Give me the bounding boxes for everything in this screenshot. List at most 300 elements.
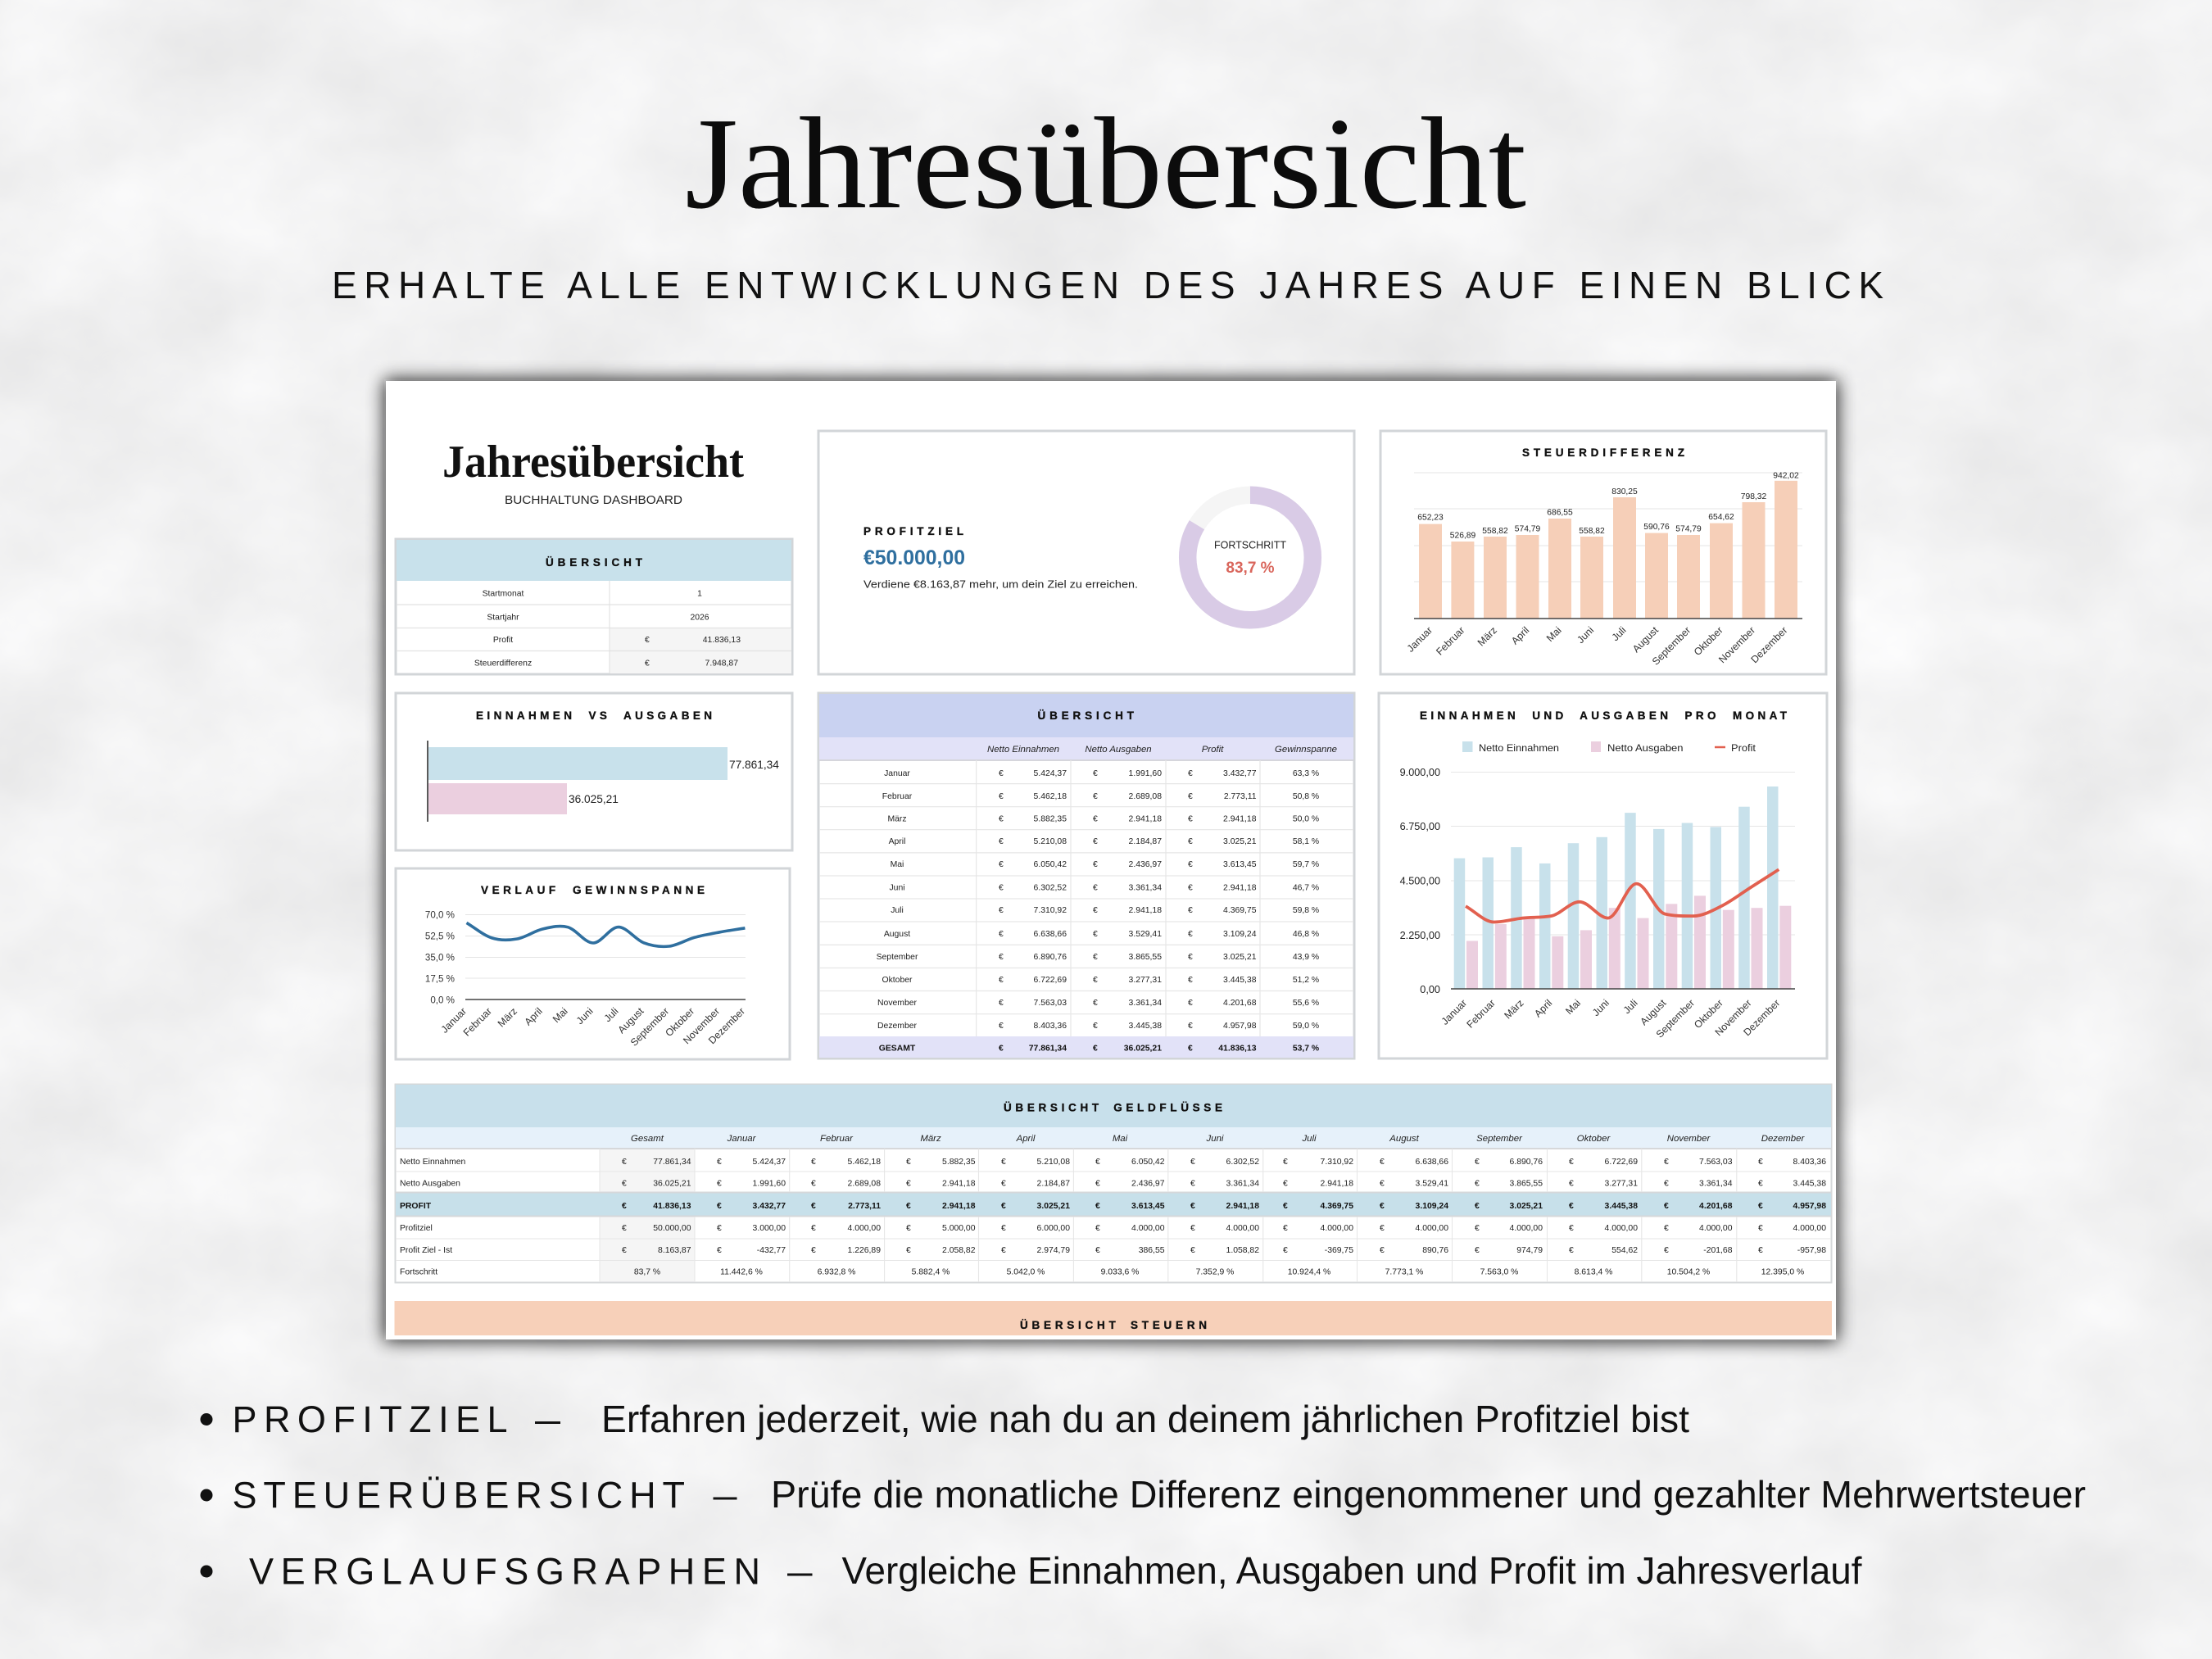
column headers: September [1476, 1134, 1523, 1144]
bar value labels: 652,23 [1417, 513, 1444, 523]
dashboard sheet shadow [384, 379, 1838, 1341]
row: Netto Einnahmen: 6.302,52 [1226, 1158, 1259, 1167]
row: Profitziel: € [1664, 1224, 1669, 1233]
x axis labels: Mai [1563, 997, 1583, 1017]
x axis labels: August [1638, 997, 1669, 1027]
bar value labels: 942,02 [1773, 472, 1799, 480]
row: Profitziel: € [717, 1224, 722, 1233]
row: Oktober: € [1093, 976, 1098, 985]
row: Juni: 46,7 % [1293, 883, 1319, 893]
row: Netto Einnahmen: Netto Einnahmen [400, 1158, 466, 1167]
row: September: 6.890,76 [1034, 953, 1067, 962]
row: März: € [999, 814, 1004, 824]
row: Juli: Juli [891, 906, 904, 915]
row: Fortschritt: 7.563,0 % [1480, 1268, 1518, 1276]
row: September [877, 953, 1319, 962]
row: Profit [493, 636, 741, 645]
x axis labels: Juni [1575, 624, 1596, 646]
row: Januar [884, 769, 1319, 778]
row: Netto Einnahmen: 77.861,34 [653, 1158, 691, 1167]
row: Netto Einnahmen: 6.638,66 [1416, 1158, 1448, 1167]
row: Startmonat: Startmonat [483, 590, 524, 598]
bullet: steuerübersicht: STEUERÜBERSICHT [233, 1475, 685, 1516]
subtitle: ERHALTE ALLE ENTWICKLUNGEN DES JAHRES AUF EINEN BLICK [332, 264, 1883, 306]
row: Profit Ziel - Ist: € [622, 1246, 627, 1255]
row: Profit Ziel - Ist [400, 1246, 1826, 1255]
row: Fortschritt: 6.932,8 % [818, 1268, 855, 1276]
row: Dezember: € [999, 1022, 1004, 1031]
x axis labels: April [523, 1005, 545, 1028]
row: PROFIT: € [1475, 1202, 1480, 1211]
row: März: 50,0 % [1293, 814, 1319, 824]
row: PROFIT: PROFIT [400, 1202, 432, 1211]
bar value labels: 830,25 [1611, 487, 1638, 496]
row: April: 58,1 % [1293, 837, 1319, 846]
row: Netto Einnahmen: € [1190, 1158, 1195, 1167]
row: April: € [999, 837, 1004, 846]
row: Juni: Juni [889, 883, 905, 893]
y axis labels: 52,5 % [425, 931, 455, 942]
column headers: April [1016, 1134, 1036, 1144]
row: Netto Einnahmen: 5.210,08 [1037, 1158, 1070, 1167]
row: Profitziel: 4.000,00 [848, 1224, 881, 1233]
row: PROFIT [400, 1202, 1826, 1211]
row: Netto Ausgaben: 3.865,55 [1510, 1180, 1543, 1188]
row: November: 7.563,03 [1034, 999, 1067, 1008]
row: Profitziel: € [622, 1224, 627, 1233]
x axis labels [1439, 997, 1782, 1040]
x axis labels: Dezember [1749, 624, 1790, 665]
row: Februar: € [1188, 792, 1193, 801]
heading: STEUERDIFFERENZ [1522, 446, 1684, 459]
row: Steuerdifferenz [474, 659, 738, 669]
row: PROFIT: 41.836,13 [653, 1202, 691, 1211]
row: Netto Ausgaben: € [1001, 1180, 1006, 1188]
row: November: € [1093, 999, 1098, 1008]
bars: steuerdifferenz [1419, 481, 1797, 619]
row: Profitziel: 3.000,00 [753, 1224, 786, 1233]
row: Oktober [882, 976, 1319, 985]
row: PROFIT: 3.025,21 [1510, 1202, 1543, 1211]
row: Oktober: 3.277,31 [1129, 976, 1162, 985]
row: Januar: € [999, 769, 1004, 778]
row: September: € [1188, 953, 1193, 962]
bar value labels: 654,62 [1708, 513, 1734, 522]
row: Profit Ziel - Ist: 2.974,79 [1037, 1246, 1070, 1255]
x axis labels [439, 1005, 747, 1049]
row: Mai: 2.436,97 [1129, 860, 1162, 869]
y axis labels: 2.250,00 [1400, 930, 1440, 941]
legend: Netto Einnahmen [1479, 742, 1559, 754]
row: PROFIT: € [811, 1202, 816, 1211]
panel: übersicht steuern [395, 1301, 1832, 1335]
bullet: profitziel: — [535, 1398, 560, 1440]
row: September: September [877, 953, 918, 962]
column headers: März [920, 1134, 941, 1144]
row: PROFIT: € [622, 1202, 627, 1211]
row: PROFIT: € [1664, 1202, 1669, 1211]
x axis labels: Juli [602, 1005, 621, 1024]
row: PROFIT: € [1190, 1202, 1195, 1211]
row: Juni [889, 883, 1319, 893]
column headers: Juni [1206, 1134, 1224, 1144]
x axis labels [1405, 624, 1790, 668]
row: Netto Ausgaben: € [1664, 1180, 1669, 1188]
bar value labels: 686,55 [1547, 508, 1573, 518]
x axis labels: September [1650, 624, 1693, 668]
legend: Netto Ausgaben [1607, 742, 1683, 754]
y axis labels: 6.750,00 [1400, 821, 1440, 832]
row: Juli [891, 906, 1319, 915]
donut: fortschritt: 83,7 % [1226, 560, 1275, 577]
row: Netto Einnahmen: 6.050,42 [1131, 1158, 1165, 1167]
bar value labels: 574,79 [1675, 524, 1702, 534]
column headers: Juli [1301, 1134, 1317, 1144]
row: Netto Ausgaben: 36.025,21 [653, 1180, 691, 1188]
row: Februar: € [999, 792, 1004, 801]
x axis labels: März [1502, 997, 1526, 1021]
row: Netto Einnahmen: 5.462,18 [848, 1158, 881, 1167]
x axis labels: Oktober [1692, 997, 1725, 1031]
row: Netto Einnahmen: € [906, 1158, 911, 1167]
row: Netto Ausgaben: € [622, 1180, 627, 1188]
row: Dezember: 8.403,36 [1034, 1022, 1067, 1031]
x axis labels: November [1713, 997, 1754, 1038]
row: Netto Einnahmen: 5.424,37 [753, 1158, 786, 1167]
row: Netto Einnahmen [400, 1158, 1826, 1167]
x axis labels: Oktober [1692, 624, 1725, 658]
row: Januar: € [1093, 769, 1098, 778]
column headers: Gesamt [631, 1134, 664, 1144]
x axis labels: Februar [1434, 624, 1467, 658]
row: Profit Ziel - Ist: 554,62 [1611, 1246, 1638, 1255]
column headers: Gewinnspanne [1275, 745, 1337, 755]
column headers: Februar [820, 1134, 854, 1144]
row: Mai: € [1093, 860, 1098, 869]
row: September: € [1093, 953, 1098, 962]
x axis labels: Juni [574, 1005, 596, 1027]
row: PROFIT: 3.445,38 [1605, 1202, 1638, 1211]
row: Profit Ziel - Ist: € [1095, 1246, 1100, 1255]
row: Netto Ausgaben: 3.445,38 [1793, 1180, 1826, 1188]
row: Gesamt: € [999, 1044, 1004, 1054]
y axis labels: 70,0 % [425, 909, 455, 921]
x axis labels: Juli [1621, 997, 1640, 1016]
row: Netto Einnahmen: € [622, 1158, 627, 1167]
row: Fortschritt: 10.504,2 % [1667, 1268, 1710, 1276]
row: November: 55,6 % [1293, 999, 1319, 1008]
row: Oktober: Oktober [882, 976, 913, 985]
row: Gesamt: 53,7 % [1293, 1044, 1319, 1054]
row: Februar [882, 792, 1319, 801]
column headers: August [1389, 1134, 1420, 1144]
y axis labels: 0,00 [1420, 984, 1440, 995]
row: Profitziel: 4.000,00 [1226, 1224, 1259, 1233]
x axis labels: März [496, 1005, 519, 1029]
row: Netto Ausgaben: 3.529,41 [1416, 1180, 1448, 1188]
row: Profit Ziel - Ist: € [906, 1246, 911, 1255]
row: Mai [891, 860, 1319, 869]
row: März [887, 814, 1319, 824]
x axis labels: Januar [1439, 997, 1469, 1027]
row: August: € [1093, 930, 1098, 939]
row: Oktober: € [1188, 976, 1193, 985]
row: Fortschritt: 8.613,4 % [1575, 1268, 1612, 1276]
row: Netto Einnahmen: 6.722,69 [1605, 1158, 1638, 1167]
row: Gesamt: € [1188, 1044, 1193, 1054]
row: September: 43,9 % [1293, 953, 1319, 962]
row: Profit Ziel - Ist: 1.226,89 [848, 1246, 881, 1255]
axis [427, 741, 428, 822]
row: Profit Ziel - Ist: -957,98 [1797, 1246, 1826, 1255]
row: Netto Einnahmen: 5.882,35 [942, 1158, 976, 1167]
row: Netto Ausgaben: Netto Ausgaben [400, 1180, 460, 1188]
heading: VERLAUF GEWINNSPANNE [481, 884, 705, 896]
row: Profit Ziel - Ist: € [1569, 1246, 1574, 1255]
row: Profit Ziel - Ist: € [1664, 1246, 1669, 1255]
row: Netto Ausgaben: 2.941,18 [942, 1180, 976, 1188]
row: Fortschritt: 5.042,0 % [1007, 1268, 1045, 1276]
row: PROFIT: 3.109,24 [1416, 1202, 1448, 1211]
x axis labels: August [615, 1005, 646, 1036]
bar value labels: 526,89 [1450, 531, 1476, 541]
row: August: 3.529,41 [1129, 930, 1162, 939]
row: Mai: 59,7 % [1293, 860, 1319, 869]
row: Oktober: 6.722,69 [1034, 976, 1067, 985]
column headers: Januar [727, 1134, 757, 1144]
x axis labels: Mai [1544, 624, 1564, 644]
x axis labels: Juni [1590, 997, 1611, 1018]
panel: übersicht summary [396, 539, 792, 674]
bar: ausgaben [428, 783, 567, 814]
row: Profitziel: 4.000,00 [1321, 1224, 1353, 1233]
x axis labels: Januar [439, 1005, 469, 1036]
row: Profitziel: € [1569, 1224, 1574, 1233]
row: Oktober: 51,2 % [1293, 976, 1319, 985]
row: Juni: 3.361,34 [1129, 883, 1162, 893]
legend [1462, 741, 1756, 754]
row: März: 5.882,35 [1034, 814, 1067, 824]
profit goal amount: €50.000,00 [863, 546, 965, 569]
bullet: verglaufsgraphen: VERGLAUFSGRAPHEN [249, 1550, 760, 1593]
row: PROFIT: 4.957,98 [1793, 1202, 1826, 1211]
row: Juli: 2.941,18 [1129, 906, 1162, 915]
row: März: € [1093, 814, 1098, 824]
heading: EINNAHMEN VS AUSGABEN [476, 709, 712, 722]
bullet: steuerübersicht: — [713, 1475, 737, 1516]
line: gewinnspanne [467, 922, 745, 946]
row: Profit Ziel - Ist: € [1380, 1246, 1385, 1255]
row: Netto Ausgaben: € [811, 1180, 816, 1188]
row: Dezember: 4.957,98 [1223, 1022, 1257, 1031]
row: PROFIT: 4.201,68 [1699, 1202, 1733, 1211]
row: Netto Ausgaben: € [906, 1180, 911, 1188]
row: Profit Ziel - Ist: € [1475, 1246, 1480, 1255]
y axis labels: 35,0 % [425, 952, 455, 963]
value: ausgaben: 36.025,21 [569, 793, 619, 805]
column headers: Dezember [1761, 1134, 1805, 1144]
row: Netto Einnahmen: € [1095, 1158, 1100, 1167]
row: April: 2.184,87 [1129, 837, 1162, 846]
row: Dezember [877, 1022, 1319, 1031]
row: PROFIT: € [1001, 1202, 1006, 1211]
row: Netto Ausgaben: € [1758, 1180, 1763, 1188]
y axis labels: 0,0 % [430, 995, 455, 1006]
x axis labels: März [1475, 624, 1499, 648]
heading: übersicht geldflüsse: ÜBERSICHT GELDFLÜSSE [1004, 1101, 1222, 1114]
row: Profitziel: 5.000,00 [942, 1224, 976, 1233]
row: Mai: 6.050,42 [1034, 860, 1067, 869]
x axis labels: November [681, 1005, 722, 1046]
x axis labels: Januar [1405, 624, 1435, 655]
row: Netto Ausgaben: € [1095, 1180, 1100, 1188]
row: Februar: 50,8 % [1293, 792, 1319, 801]
row: Profitziel: € [1380, 1224, 1385, 1233]
row: Mai: Mai [891, 860, 904, 869]
row: Netto Ausgaben: 2.436,97 [1131, 1180, 1165, 1188]
x axis labels: Dezember [706, 1005, 747, 1046]
dashboard sheet [386, 381, 1836, 1339]
row: Fortschritt: 12.395,0 % [1761, 1268, 1804, 1276]
row: Profit Ziel - Ist: € [1283, 1246, 1288, 1255]
row: Profit Ziel - Ist: 386,55 [1139, 1246, 1165, 1255]
row: Steuerdifferenz: Steuerdifferenz [474, 659, 532, 669]
row: Startjahr: 2026 [690, 613, 709, 623]
row: November: € [999, 999, 1004, 1008]
row: Februar: 2.689,08 [1129, 792, 1162, 801]
row: Netto Einnahmen: € [811, 1158, 816, 1167]
row: Januar: 1.991,60 [1129, 769, 1162, 778]
row: Profit Ziel - Ist: 8.163,87 [658, 1246, 691, 1255]
row: März: € [1188, 814, 1193, 824]
row: Dezember: € [1093, 1022, 1098, 1031]
row: Profitziel: 6.000,00 [1037, 1224, 1070, 1233]
bar value labels: 574,79 [1515, 524, 1541, 534]
row: Netto Einnahmen: € [1758, 1158, 1763, 1167]
row: Profit Ziel - Ist: 2.058,82 [942, 1246, 976, 1255]
row: April: 5.210,08 [1034, 837, 1067, 846]
y axis labels: 17,5 % [425, 973, 455, 985]
row: Juli: 4.369,75 [1223, 906, 1257, 915]
row: Dezember: 3.445,38 [1129, 1022, 1162, 1031]
y axis labels [425, 909, 455, 1006]
row: Startmonat: 1 [697, 590, 702, 598]
row: Oktober: 3.445,38 [1223, 976, 1257, 985]
y axis labels: 4.500,00 [1400, 875, 1440, 886]
row: Profitziel: € [1190, 1224, 1195, 1233]
row: Profit Ziel - Ist: 1.058,82 [1226, 1246, 1259, 1255]
row: PROFIT: € [1283, 1202, 1288, 1211]
row: März: März [887, 814, 907, 824]
bullet: profitziel: Erfahren jederzeit, wie nah du an deinem jährlichen Profitziel bist [601, 1398, 1689, 1440]
row: Profit Ziel - Ist: -369,75 [1325, 1246, 1353, 1255]
column headers: Netto Einnahmen [987, 745, 1059, 755]
row: Netto Ausgaben [400, 1180, 1826, 1188]
row: PROFIT: € [1569, 1202, 1574, 1211]
panel: übersicht monthly table [818, 693, 1354, 1058]
row: September: 3.865,55 [1129, 953, 1162, 962]
row: Netto Einnahmen: € [1664, 1158, 1669, 1167]
title: Jahresübersicht [685, 90, 1526, 236]
bar value labels: 798,32 [1741, 492, 1767, 501]
goal note: Verdiene €8.163,87 mehr, um dein Ziel zu erreichen. [863, 578, 1138, 590]
row: Mai: 3.613,45 [1223, 860, 1257, 869]
column headers [631, 1134, 1805, 1144]
row: Fortschritt: Fortschritt [400, 1268, 437, 1276]
row: Juni: € [999, 883, 1004, 893]
row: PROFIT: € [906, 1202, 911, 1211]
row: Mai: € [999, 860, 1004, 869]
row: Profitziel: € [1283, 1224, 1288, 1233]
row: August: € [1188, 930, 1193, 939]
x axis labels: Juli [1610, 624, 1629, 643]
row: Netto Einnahmen: 8.403,36 [1793, 1158, 1826, 1167]
panel: profitziel [818, 431, 1354, 674]
row: Profitziel [400, 1224, 1826, 1233]
row: PROFIT: € [717, 1202, 722, 1211]
row: Netto Einnahmen: € [1001, 1158, 1006, 1167]
x axis labels: September [1654, 997, 1697, 1040]
bar value labels: 558,82 [1482, 527, 1508, 536]
y axis labels: 9.000,00 [1400, 767, 1440, 778]
row: Dezember: 59,0 % [1293, 1022, 1319, 1031]
row: Startjahr: Startjahr [487, 613, 519, 623]
bars: netto ausgaben [1466, 895, 1791, 989]
row: Netto Ausgaben: € [1475, 1180, 1480, 1188]
row: Netto Ausgaben: € [717, 1180, 722, 1188]
row: Juli: € [1093, 906, 1098, 915]
column headers [987, 745, 1337, 755]
heading: EINNAHMEN UND AUSGABEN PRO MONAT [1420, 709, 1788, 722]
row: Profitziel: Profitziel [400, 1224, 433, 1233]
row: Juli: € [999, 906, 1004, 915]
row: Profit Ziel - Ist: -201,68 [1703, 1246, 1733, 1255]
bar: einnahmen [428, 747, 728, 780]
row: Profitziel: 4.000,00 [1699, 1224, 1733, 1233]
row: Netto Einnahmen: € [717, 1158, 722, 1167]
line: profit [1466, 869, 1779, 922]
row: Fortschritt: 9.033,6 % [1101, 1268, 1139, 1276]
column headers: Oktober [1577, 1134, 1611, 1144]
row: Netto Ausgaben: € [1569, 1180, 1574, 1188]
row: PROFIT: 4.369,75 [1321, 1202, 1353, 1211]
row: Netto Einnahmen: € [1380, 1158, 1385, 1167]
row: Profit: 41.836,13 [703, 636, 741, 645]
row: Profitziel: € [811, 1224, 816, 1233]
row: Profit: Profit [493, 636, 513, 645]
row: Profit Ziel - Ist: 890,76 [1422, 1246, 1448, 1255]
value: einnahmen: 77.861,34 [729, 759, 779, 771]
row: Profitziel: 50.000,00 [653, 1224, 691, 1233]
row: Netto Einnahmen: € [1475, 1158, 1480, 1167]
column headers: November [1667, 1134, 1711, 1144]
column headers: Netto Ausgaben [1085, 745, 1152, 755]
row: PROFIT: 3.025,21 [1037, 1202, 1070, 1211]
row: Februar: 2.773,11 [1224, 792, 1257, 801]
row: Profit Ziel - Ist: € [811, 1246, 816, 1255]
row: August [884, 930, 1319, 939]
row: Januar: Januar [884, 769, 910, 778]
bullet: verglaufsgraphen [200, 1549, 1862, 1593]
row: Fortschritt [400, 1268, 1804, 1276]
row: Netto Ausgaben: 2.941,18 [1321, 1180, 1353, 1188]
panel: steuerdifferenz [1380, 431, 1826, 674]
row: April: April [889, 837, 905, 846]
row: Gesamt: GESAMT [879, 1044, 916, 1054]
row: Startjahr [487, 613, 709, 623]
row: Netto Ausgaben: 3.361,34 [1226, 1180, 1259, 1188]
panel: übersicht geldflüsse [395, 1085, 1832, 1283]
